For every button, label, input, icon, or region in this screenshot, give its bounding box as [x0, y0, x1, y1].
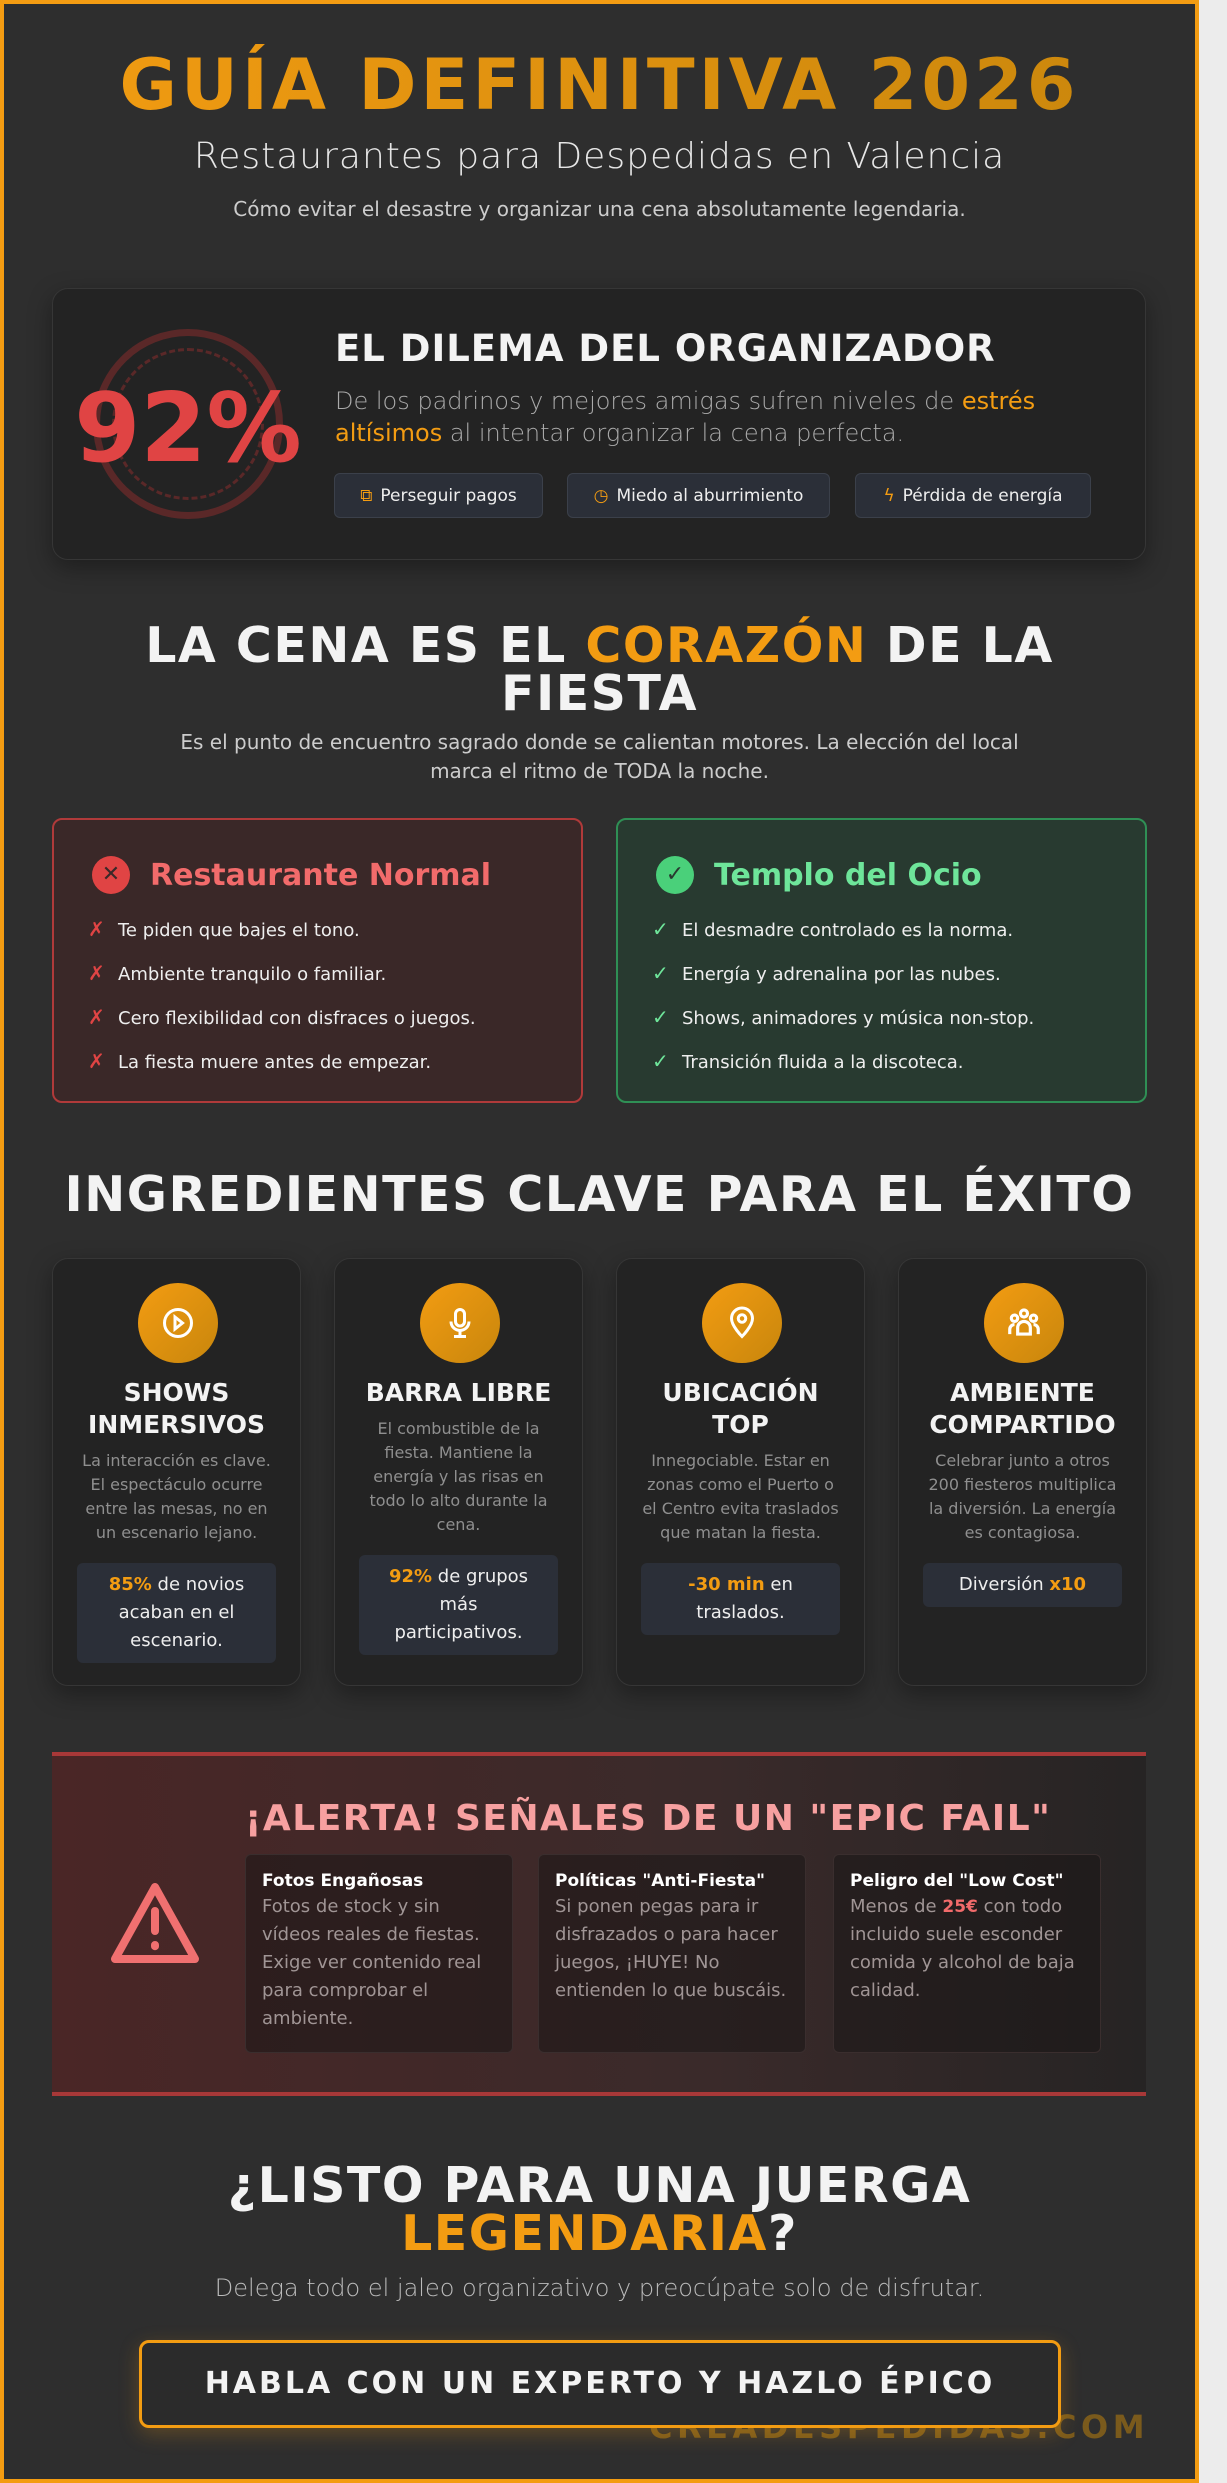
heading: corazón: FIESTA	[501, 665, 698, 722]
icon: check: ✓	[666, 862, 684, 887]
card: shows: SHOWS	[124, 1378, 229, 1407]
icon: warning	[111, 1883, 199, 1963]
watermark: CREADESPEDIDAS.COM	[649, 2408, 1149, 2446]
card: shows: La interacción es clave. El espectáculo ocurre entre las mesas, no en un escenario lejano.	[82, 1451, 271, 1542]
chip: energia: Pérdida de energía	[903, 486, 1063, 506]
panel: templo del ocio: ✓	[652, 961, 669, 985]
chip: pagos: ⧉	[360, 486, 372, 506]
card: barra libre: BARRA LIBRE	[366, 1378, 551, 1407]
card: ubicacion: Innegociable. Estar en zonas como el Puerto o el Centro evita traslados que matan la fiesta.	[642, 1451, 839, 1542]
card: barra libre: más	[440, 1594, 477, 1615]
title: GUÍA DEFINITIVA 2026	[120, 44, 1079, 126]
panel: templo del ocio: Transición fluida a la discoteca.	[682, 1052, 964, 1073]
chip: energia	[855, 473, 1091, 518]
panel: templo del ocio: Templo del Ocio	[714, 858, 982, 893]
cta button: HABLA CON UN EXPERTO Y HAZLO ÉPICO	[205, 2366, 995, 2401]
subtitle: Restaurantes para Despedidas en Valencia	[194, 136, 1005, 177]
alert title: ¡ALERTA! SEÑALES DE UN "EPIC FAIL"	[245, 1798, 1051, 1839]
card: ambiente	[898, 1258, 1147, 1686]
chip: aburrimiento: ◷	[594, 486, 608, 506]
alert: low cost: Menos de 25€ con todo incluido suele esconder comida y alcohol de baja calidad.	[850, 1896, 1075, 2001]
cta heading: LEGENDARIA?	[401, 2205, 798, 2262]
chip: energia: ϟ	[883, 486, 895, 506]
alert: fotos: Fotos Engañosas	[262, 1871, 423, 1891]
card: barra libre: participativos.	[394, 1622, 523, 1643]
card: ubicacion: TOP	[712, 1410, 769, 1439]
cta button	[139, 2340, 1061, 2428]
panel: dilema	[52, 288, 1146, 560]
panel: restaurante normal: ✗	[88, 917, 105, 941]
alert: fotos: Fotos de stock y sin vídeos reales de fiestas. Exige ver contenido real para comprobar el ambiente.	[262, 1896, 481, 2029]
alert: politicas: Si ponen pegas para ir disfrazados o para hacer juegos, ¡HUYE! No entienden lo que buscáis.	[555, 1896, 786, 2001]
cta heading	[228, 2157, 971, 2262]
card: ubicacion: UBICACIÓN	[662, 1378, 819, 1407]
alert: low cost: Peligro del "Low Cost"	[850, 1871, 1064, 1891]
icon: x	[92, 856, 130, 894]
panel: alerta	[52, 1752, 1146, 2096]
chip: pagos	[334, 473, 543, 518]
cta text: Delega todo el jaleo organizativo y preocúpate solo de disfrutar.	[215, 2274, 984, 2302]
panel: restaurante normal: Te piden que bajes el tono.	[118, 920, 360, 941]
card: shows: INMERSIVOS	[88, 1410, 265, 1439]
alert: politicas	[538, 1854, 806, 2053]
panel: restaurante normal: Restaurante Normal	[150, 858, 491, 893]
panel: restaurante normal: ✗	[88, 961, 105, 985]
panel: restaurante normal: ✗	[88, 1049, 105, 1073]
panel: templo del ocio: ✓	[652, 1049, 669, 1073]
stat circle 92%: 92%	[74, 374, 302, 484]
text: corazón: Es el punto de encuentro sagrado donde se calientan motores. La elección del local marca el ritmo de TODA la noche.	[180, 730, 1019, 783]
icon: check	[656, 856, 694, 894]
text: De los padrinos y mejores amigas sufren niveles de estrés altísimos al intentar organizar la cena perfecta.	[335, 387, 1035, 447]
stat circle 92%	[93, 329, 283, 519]
panel: templo del ocio: ✓	[652, 917, 669, 941]
chip: aburrimiento: Miedo al aburrimiento	[616, 486, 803, 506]
panel: templo del ocio: Energía y adrenalina por las nubes.	[682, 964, 1001, 985]
alert: fotos	[245, 1854, 513, 2053]
panel: templo del ocio	[616, 818, 1147, 1103]
chip: aburrimiento	[567, 473, 830, 518]
card: ambiente: Diversión x10	[959, 1574, 1086, 1595]
panel: templo del ocio: Shows, animadores y música non-stop.	[682, 1008, 1034, 1029]
card: shows	[52, 1258, 301, 1686]
heading: ingredientes: INGREDIENTES CLAVE PARA EL ÉXITO	[65, 1166, 1134, 1223]
card: ambiente: COMPARTIDO	[929, 1410, 1116, 1439]
card: ubicacion: -30 min en traslados.	[688, 1574, 793, 1623]
tagline: Cómo evitar el desastre y organizar una cena absolutamente legendaria.	[233, 197, 966, 221]
heading: corazón: LA CENA ES EL CORAZÓN DE LA	[145, 617, 1054, 674]
panel: restaurante normal	[52, 818, 583, 1103]
icon: x: ✕	[102, 862, 120, 887]
card: barra libre: El combustible de la fiesta. Mantiene la energía y las risas en todo lo alto durante la cena.	[369, 1419, 548, 1534]
alert: low cost	[833, 1854, 1101, 2053]
heading: corazón	[145, 616, 1054, 722]
card: ambiente: AMBIENTE	[950, 1378, 1095, 1407]
panel: restaurante normal: Cero flexibilidad con disfraces o juegos.	[118, 1008, 476, 1029]
card: ambiente: Celebrar junto a otros 200 fiesteros multiplica la diversión. La energía es contagiosa.	[928, 1451, 1116, 1542]
cta heading: ¿LISTO PARA UNA JUERGA	[228, 2157, 971, 2214]
panel: restaurante normal: ✗	[88, 1005, 105, 1029]
card: barra libre	[334, 1258, 583, 1686]
heading: EL DILEMA DEL ORGANIZADOR	[335, 327, 996, 370]
card: ubicacion	[616, 1258, 865, 1686]
panel: templo del ocio: El desmadre controlado es la norma.	[682, 920, 1013, 941]
panel: restaurante normal: La fiesta muere antes de empezar.	[118, 1052, 431, 1073]
panel: templo del ocio: ✓	[652, 1005, 669, 1029]
panel: restaurante normal: Ambiente tranquilo o familiar.	[118, 964, 386, 985]
alert: politicas: Políticas "Anti-Fiesta"	[555, 1871, 765, 1891]
card: barra libre: 92% de grupos	[389, 1566, 528, 1587]
chip: pagos: Perseguir pagos	[380, 486, 517, 506]
card: shows: 85% de novios acaban en el escenario.	[109, 1574, 244, 1651]
